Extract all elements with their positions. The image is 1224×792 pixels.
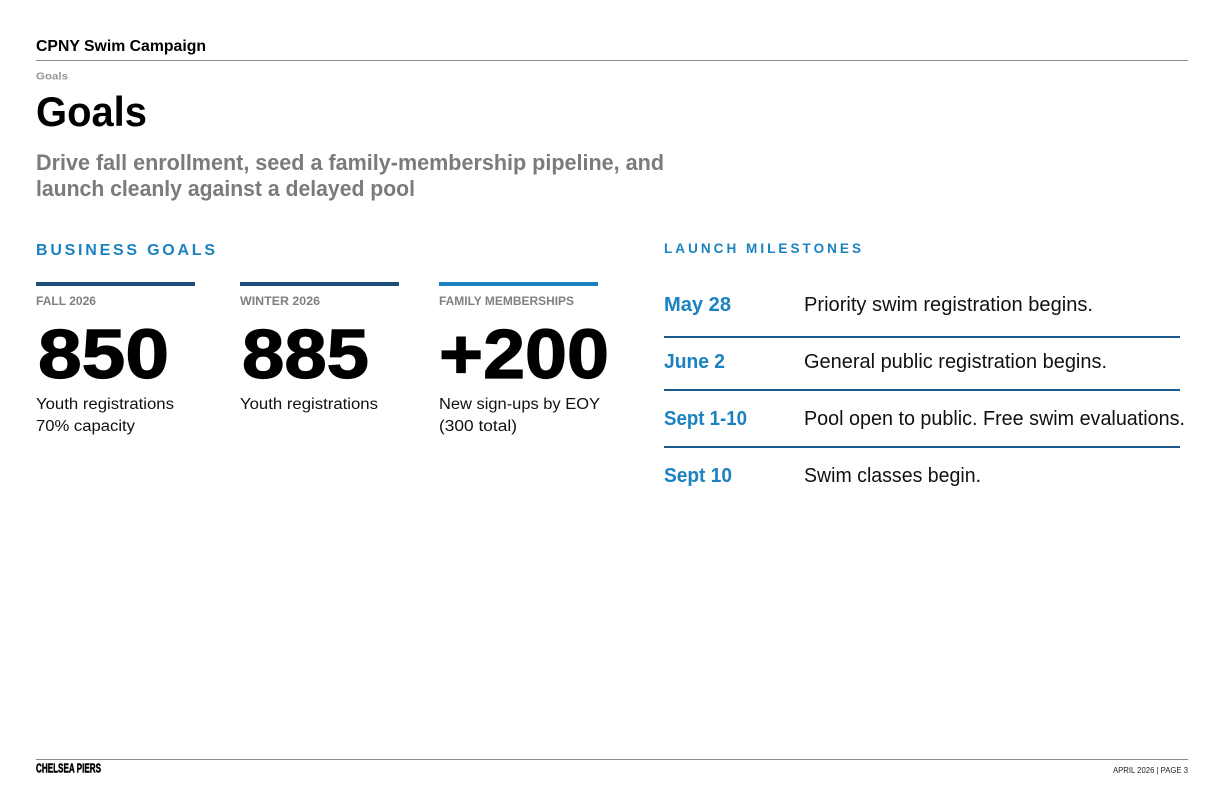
goal card: fall 2026: Youth registrations [36, 396, 174, 413]
page info: APRIL 2026 | PAGE 3 [1113, 765, 1188, 775]
milestone: sept 1-10: Sept 1-10 [664, 408, 747, 430]
milestone: sept 10 [664, 465, 981, 487]
title: Goals [36, 88, 147, 135]
milestone: sept 10: Sept 10 [664, 465, 732, 487]
panel: business goals [36, 242, 609, 435]
goal card: family memberships: +200 [439, 315, 609, 393]
milestone: sept 10: Swim classes begin. [804, 465, 981, 487]
milestone: june 2: June 2 [664, 351, 725, 373]
breadcrumb: Goals [36, 70, 68, 82]
footer [36, 759, 1188, 776]
goal card: winter 2026: Youth registrations [240, 396, 378, 413]
milestone: may 28: Priority swim registration begins. [804, 294, 1093, 316]
goal card: family memberships: (300 total) [439, 418, 517, 435]
goal card: family memberships: FAMILY MEMBERSHIPS [439, 296, 574, 308]
goal card: fall 2026 [36, 282, 195, 435]
panel: launch milestones [664, 241, 1185, 487]
goal card: fall 2026: 850 [38, 315, 169, 393]
milestone: june 2 [664, 351, 1107, 373]
milestone: sept 1-10: Pool open to public. Free swim evaluations. [804, 408, 1185, 430]
subtitle [36, 150, 664, 201]
goal card: fall 2026: FALL 2026 [36, 296, 96, 308]
milestone: may 28: May 28 [664, 294, 731, 316]
milestone: june 2: General public registration begins. [804, 351, 1107, 373]
subtitle: launch cleanly against a delayed pool [36, 176, 415, 201]
heading: business goals: BUSINESS GOALS [36, 242, 215, 259]
goal card: winter 2026: 885 [242, 315, 369, 393]
goal card: winter 2026 [240, 282, 399, 413]
milestone: may 28 [664, 294, 1093, 316]
subtitle: Drive fall enrollment, seed a family-membership pipeline, and [36, 150, 664, 175]
logo: chelsea piers: CHELSEA PIERS [36, 762, 101, 776]
goal card: family memberships: New sign-ups by EOY [439, 396, 600, 413]
heading: launch milestones: LAUNCH MILESTONES [664, 241, 861, 256]
goal card: winter 2026: WINTER 2026 [240, 296, 320, 308]
goal card: family memberships [439, 282, 609, 435]
header: campaign name and rule: CPNY Swim Campaign [36, 38, 206, 55]
goal card: fall 2026: 70% capacity [36, 418, 135, 435]
